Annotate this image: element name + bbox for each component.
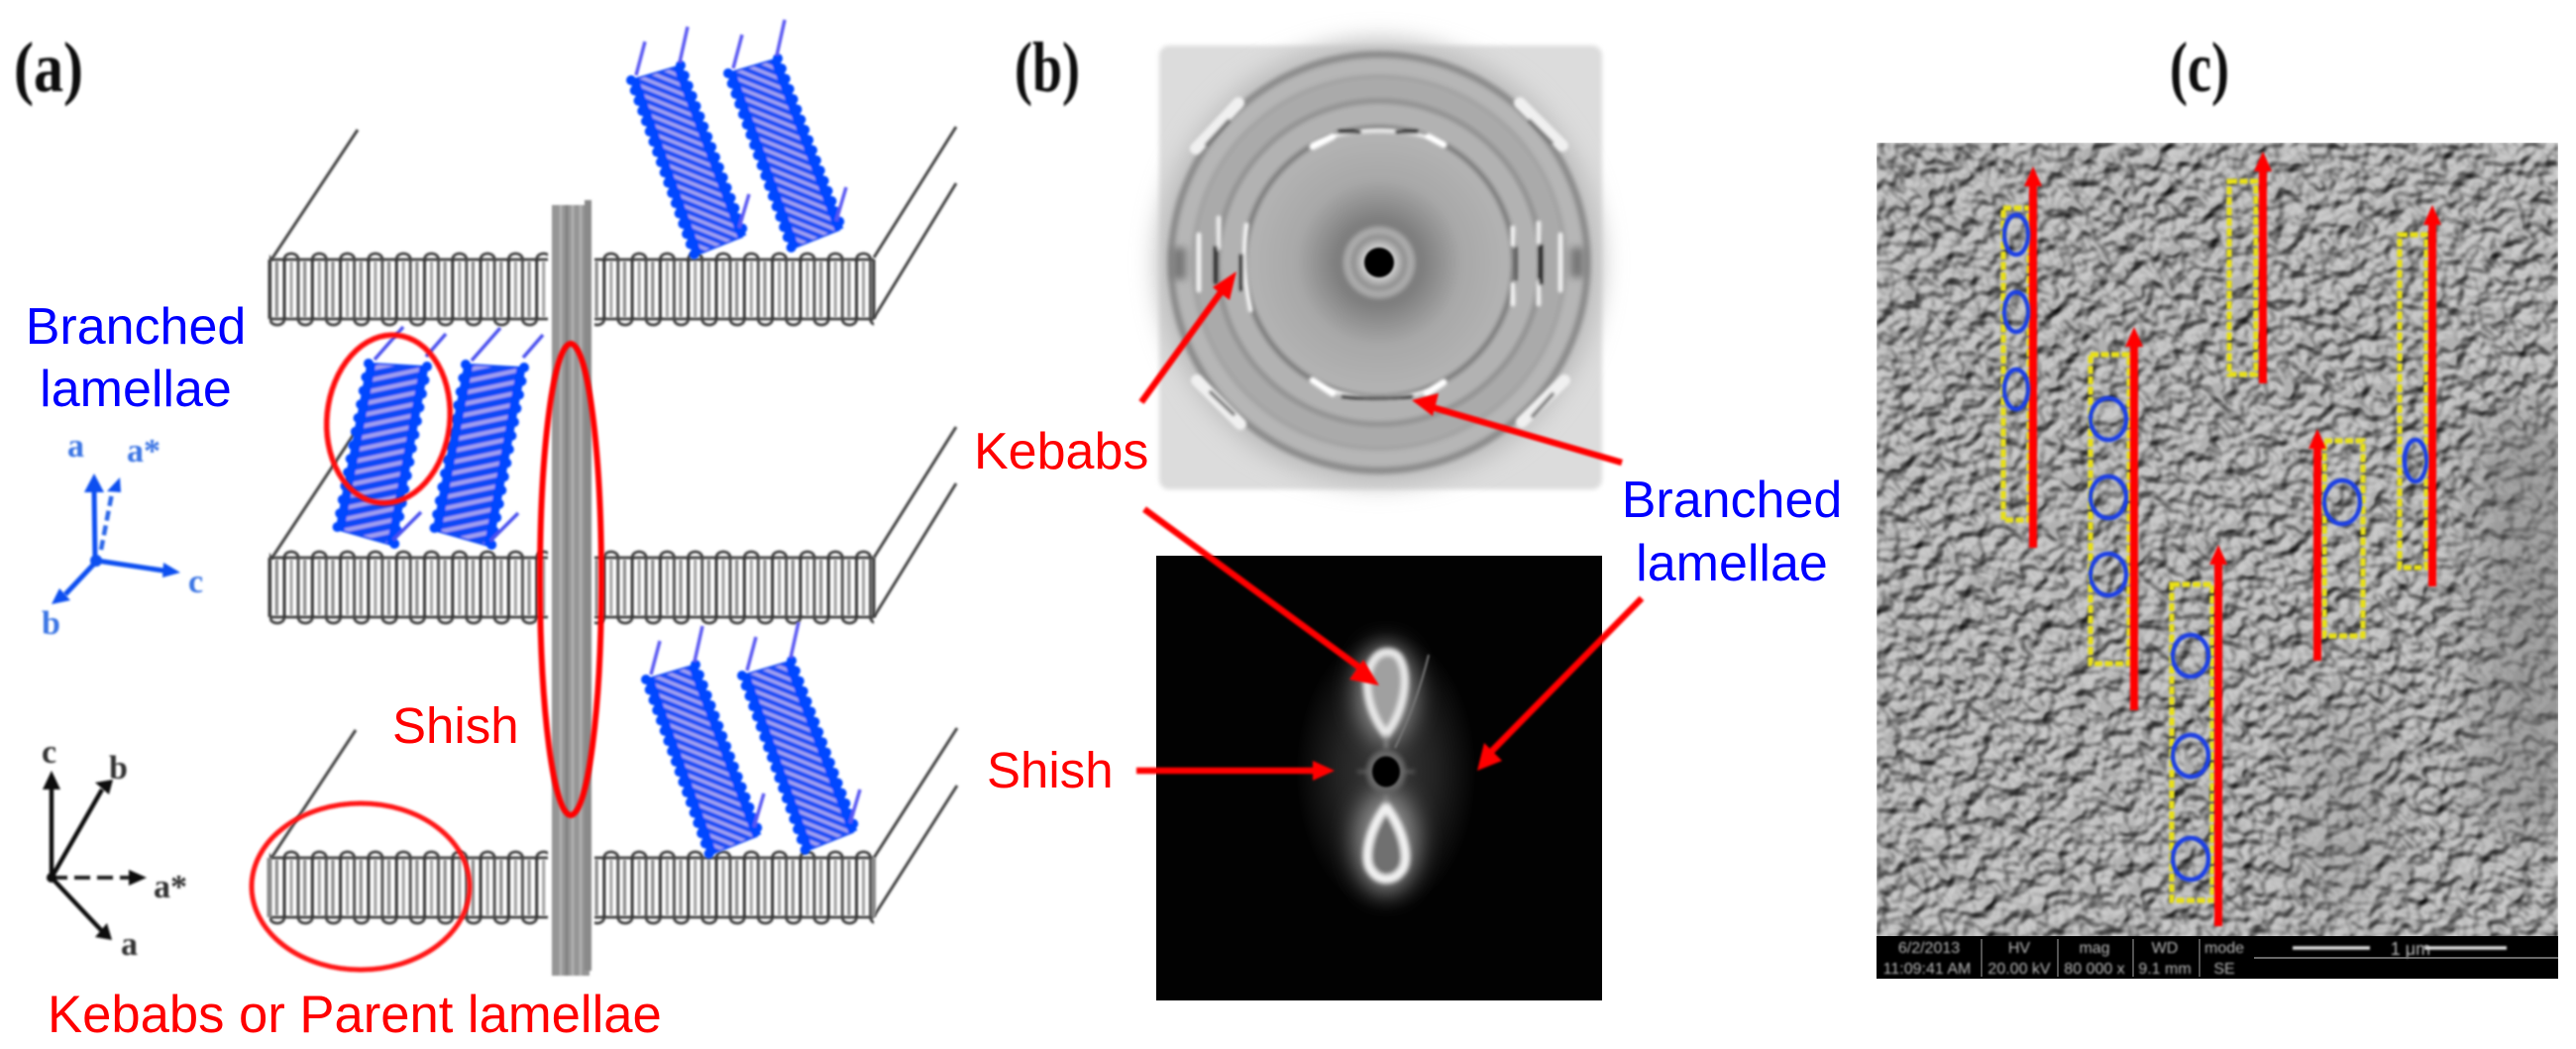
SEM info bar — [1877, 936, 2558, 979]
SEM info bar: HV — [2008, 940, 2030, 957]
top rod — [269, 250, 874, 339]
WAXS ring pattern image — [1156, 40, 1602, 489]
SEM info bar: 80 000 x — [2064, 961, 2125, 978]
panel label (b): (b) — [1015, 28, 1080, 107]
label: Branched lamellae: Branched — [26, 298, 246, 356]
panel label (a): (a) — [14, 28, 83, 107]
SEM info bar: SE — [2213, 961, 2235, 978]
SEM info bar: 6/2/2013 — [1898, 940, 1960, 957]
bottom rod — [269, 848, 874, 937]
panel: (a) shish-kebab schematic — [14, 20, 957, 1044]
SEM info bar: mode — [2204, 940, 2244, 957]
blue circles marking branched lamellae — [2004, 215, 2426, 880]
branched lamellae (blue) — [337, 20, 860, 855]
branched lamella bottom left — [646, 626, 764, 855]
black crystal axes: a — [121, 926, 138, 963]
arrow: Shish to SAXS — [1136, 761, 1335, 781]
label: Shish: Shish — [987, 742, 1114, 798]
arrow 2 — [2254, 152, 2272, 383]
label: Shish: Shish — [392, 697, 519, 754]
arrow: Kebabs to SAXS lobe — [1144, 509, 1379, 685]
perspective edge lines of the parent lamellae — [271, 127, 957, 916]
label: Branched lamellae: lamellae — [1636, 535, 1828, 592]
label: Branched lamellae: lamellae — [40, 361, 232, 418]
SEM info bar: mag — [2079, 940, 2110, 957]
red direction arrows — [2024, 152, 2441, 926]
label: Kebabs or Parent lamellae: Kebabs or Parent lamellae — [48, 986, 662, 1044]
black crystal axes: a* — [154, 869, 187, 905]
blue crystal axes: a — [67, 428, 84, 465]
shish central column — [552, 200, 591, 976]
black crystal axes: c — [42, 734, 56, 771]
blue crystal axes — [42, 428, 203, 642]
yellow dashed boxes — [2003, 181, 2426, 900]
branched lamella middle left — [337, 327, 446, 545]
blue crystal axes: b — [42, 605, 60, 642]
blue crystal axes: c — [188, 564, 203, 600]
arrow 3 — [2125, 327, 2143, 710]
SEM info bar: 1 μm — [2391, 939, 2430, 959]
SEM image texture — [1877, 143, 2576, 979]
black crystal axes — [42, 734, 187, 963]
SEM info bar: 11:09:41 AM — [1883, 961, 1971, 978]
SEM info bar: 9.1 mm — [2138, 961, 2192, 978]
black crystal axes: b — [109, 750, 128, 787]
arrow: Kebabs to ring pattern — [1141, 271, 1236, 402]
red ellipse around kebab — [252, 803, 470, 970]
red ellipse around branched lamella — [318, 329, 459, 509]
panel: (c) SEM micrograph — [1877, 28, 2576, 979]
middle rod — [269, 548, 874, 637]
parent lamellae rods (kebabs) — [269, 250, 874, 937]
label: Branched lamellae: Branched — [1622, 472, 1842, 529]
panel: (b) scattering patterns — [974, 28, 1842, 1000]
arrow: Branched lamellae to SAXS — [1477, 598, 1642, 771]
SAXS pattern image — [1156, 556, 1602, 1000]
branched lamella top right — [728, 20, 846, 249]
panel label (c): (c) — [2170, 28, 2229, 107]
arrow 1 — [2024, 166, 2042, 548]
blue crystal axes: a* — [127, 433, 161, 470]
arrow: Branched lamellae to ring pattern — [1412, 393, 1622, 463]
branched lamella middle right — [434, 328, 543, 546]
arrow 4 — [2423, 205, 2441, 586]
SEM info bar: 20.00 kV — [1987, 961, 2051, 978]
red ellipse around shish — [540, 344, 601, 815]
branched lamella bottom right — [742, 622, 860, 851]
label: Kebabs: Kebabs — [974, 423, 1148, 480]
SEM info bar: WD — [2152, 940, 2178, 957]
arrow 6 — [2209, 545, 2227, 926]
branched lamella top left — [631, 27, 749, 256]
arrow 5 — [2308, 429, 2326, 661]
